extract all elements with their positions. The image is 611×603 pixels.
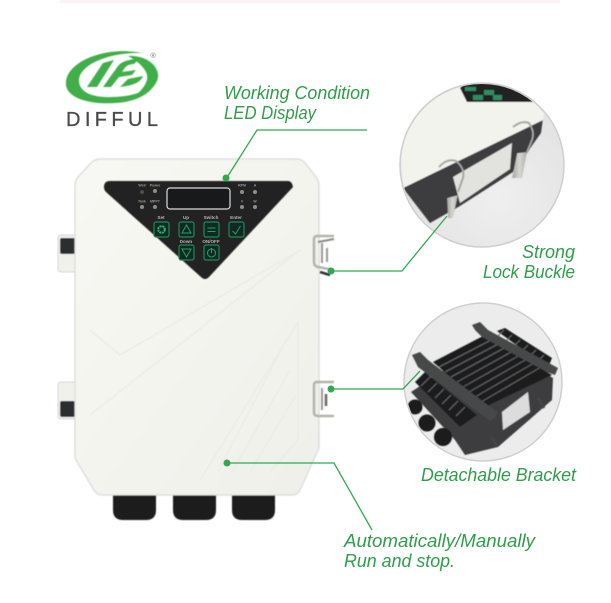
- base body: [410, 370, 554, 456]
- label: run and stop: Run and stop.: [344, 551, 455, 571]
- control panel: [104, 181, 293, 279]
- indicator labels: Power: [150, 184, 161, 188]
- indicator labels: RPM: [238, 184, 246, 188]
- indicator labels: Tank: [138, 200, 146, 204]
- mounting screws: [542, 406, 546, 410]
- top tinted strip: [60, 0, 560, 3]
- button: up: [179, 222, 194, 237]
- button labels: Set: [157, 215, 165, 220]
- callout: led display: [222, 83, 370, 182]
- button labels: [157, 215, 242, 244]
- left hinges: [58, 235, 77, 419]
- label: strong lock buckle: Strong: [522, 242, 575, 262]
- label: lock buckle line 2: Lock Buckle: [483, 262, 575, 282]
- button labels: ON/OFF: [202, 239, 220, 244]
- lcd display: [167, 188, 230, 209]
- indicator labels: Well: [138, 184, 146, 188]
- indicator labels: W: [253, 200, 257, 204]
- controller enclosure: [58, 159, 334, 520]
- label: led display line 2: LED Display: [224, 103, 317, 123]
- panel background: [104, 181, 293, 279]
- latches: [439, 122, 533, 218]
- callout: auto manual: [224, 460, 372, 530]
- cable glands: [408, 400, 422, 414]
- photo: buckle detail: [395, 70, 564, 247]
- button: enter: [229, 222, 244, 237]
- callout: lock buckle: [328, 216, 447, 274]
- logo: Difful: [66, 51, 158, 131]
- heat sink fins: [433, 335, 552, 407]
- instruction label: [453, 143, 512, 203]
- logo emblem: [66, 51, 158, 103]
- indicator labels: A: [254, 184, 257, 188]
- circle background: [404, 303, 562, 461]
- callout: bracket: [328, 371, 420, 392]
- brand name: DIFFUL: [66, 109, 158, 131]
- photo: bracket detail: [404, 303, 562, 461]
- enclosure dark side: [403, 118, 543, 223]
- mounting brackets: [412, 352, 497, 421]
- circle background: [400, 83, 564, 247]
- indicator labels: V: [241, 200, 244, 204]
- enclosure lid: [402, 86, 544, 188]
- indicator labels: MPPT: [150, 200, 161, 204]
- button labels: Switch: [204, 215, 219, 220]
- spec label: [502, 392, 530, 430]
- button: switch: [204, 222, 219, 237]
- button: on/off: [204, 245, 219, 260]
- label: automatically manually: Automatically/Manually: [343, 531, 536, 551]
- button: set: [154, 222, 169, 237]
- lower lock buckle: [314, 382, 334, 416]
- label: detachable bracket: Detachable Bracket: [421, 465, 577, 485]
- button labels: Down: [180, 239, 192, 244]
- indicator labels: [138, 184, 257, 204]
- button: down: [179, 245, 194, 260]
- lid facets: [90, 250, 300, 480]
- upper lock buckle: [314, 236, 334, 275]
- control panel corner: [460, 84, 533, 103]
- button labels: Up: [183, 215, 189, 220]
- indicator leds: [140, 189, 257, 209]
- button labels: Enter: [230, 215, 242, 220]
- cable glands: [113, 494, 275, 520]
- registered mark: ®: [150, 52, 156, 60]
- label: Working Condition: [224, 83, 370, 103]
- enclosure body: [75, 159, 319, 495]
